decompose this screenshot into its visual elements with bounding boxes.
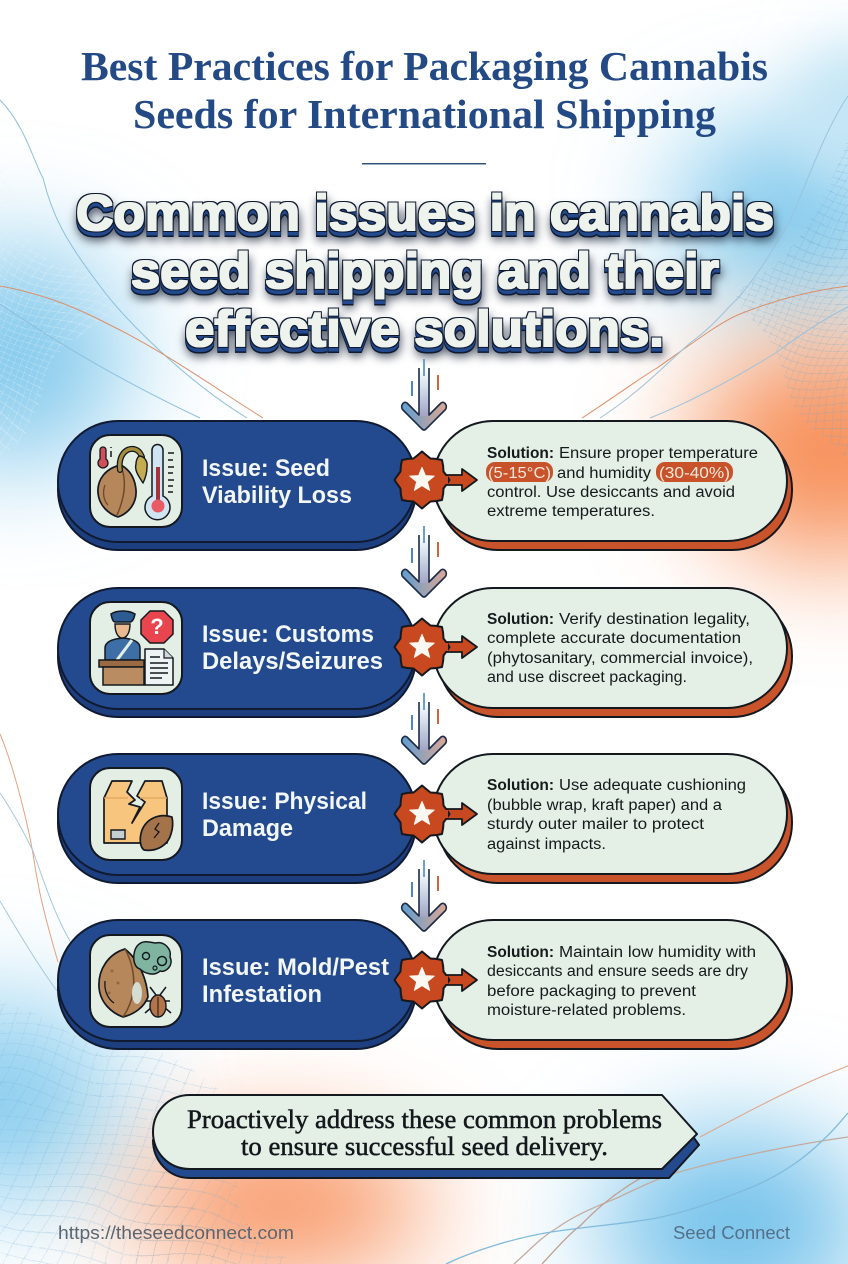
- issue pill: [58, 588, 416, 717]
- title: [81, 43, 768, 137]
- solution text: [487, 777, 746, 853]
- solution pill: [433, 920, 792, 1049]
- solution text: (phytosanitary, commercial invoice),: [487, 650, 753, 667]
- solution text: control. Use desiccants and avoid: [487, 484, 735, 501]
- solution text: before packaging to prevent: [487, 983, 697, 1000]
- panel: customs delays: [58, 588, 792, 717]
- issue pill: [58, 920, 416, 1049]
- solution text: Use adequate cushioning: [559, 777, 746, 794]
- solution text: and use discreet packaging.: [487, 669, 687, 686]
- issue label: Issue: Mold/Pest: [202, 954, 389, 981]
- panel: physical damage: [58, 754, 792, 883]
- headline: Common issues in cannabis: [76, 185, 774, 241]
- icon: cracked box and seed: [90, 768, 182, 860]
- icon: moldy seed and beetle: [90, 935, 182, 1027]
- arrow: into issue 4: [402, 860, 446, 931]
- issue pill: [58, 754, 416, 883]
- solution text: extreme temperatures.: [487, 503, 655, 520]
- issue label: Delays/Seizures: [202, 648, 383, 675]
- issue label: Issue: Customs: [202, 621, 374, 648]
- solution text: desiccants and ensure seeds are dry: [487, 963, 748, 980]
- footer url: https://theseedconnect.com: [58, 1223, 294, 1243]
- solution text: Solution:: [487, 777, 554, 794]
- issue label: [202, 788, 367, 842]
- arrow: into issue 3: [402, 693, 446, 764]
- solution pill: [433, 754, 792, 883]
- solution text: [486, 445, 758, 520]
- title: Best Practices for Packaging Cannabis: [81, 43, 768, 89]
- solution text: (30-40%): [659, 465, 730, 482]
- badge: star connector: [394, 452, 477, 508]
- badge: star connector: [394, 618, 477, 676]
- solution text: [487, 944, 756, 1019]
- solution text: and humidity: [557, 465, 651, 482]
- issue label: [202, 455, 352, 509]
- solution text: (5-15°C): [488, 465, 551, 482]
- callout text: [187, 1105, 662, 1161]
- solution text: Solution:: [487, 944, 554, 961]
- callout text: to ensure successful seed delivery.: [241, 1132, 608, 1161]
- callout text: Proactively address these common problems: [187, 1105, 662, 1134]
- issue label: Damage: [202, 815, 293, 842]
- solution pill: [433, 421, 792, 550]
- headline: effective solutions.: [185, 301, 664, 357]
- headline: [76, 185, 774, 357]
- headline: seed shipping and their: [131, 243, 719, 299]
- issue label: [202, 621, 383, 675]
- solution text: [487, 611, 753, 686]
- issue label: [202, 954, 389, 1008]
- title: Seeds for International Shipping: [133, 91, 716, 137]
- solution text: Maintain low humidity with: [559, 944, 756, 961]
- footer brand: Seed Connect: [673, 1223, 790, 1243]
- panel: mold and pest infestation: [58, 920, 792, 1049]
- issue label: Issue: Physical: [202, 788, 367, 815]
- issue pill: [58, 421, 416, 550]
- solution text: against impacts.: [487, 836, 606, 853]
- panel: seed viability loss: [58, 421, 792, 550]
- icon: sprouting seed and thermometer: [90, 435, 182, 527]
- arrow: into issue 2: [402, 526, 446, 597]
- solution text: Solution:: [487, 445, 554, 462]
- badge: star connector: [394, 786, 477, 842]
- issue label: Issue: Seed: [202, 455, 330, 482]
- solution pill: [433, 588, 792, 717]
- solution text: (bubble wrap, kraft paper) and a: [487, 797, 722, 814]
- callout banner: [153, 1095, 699, 1178]
- solution text: moisture-related problems.: [487, 1002, 686, 1019]
- solution text: complete accurate documentation: [487, 630, 741, 647]
- icon: customs officer, stop sign and document: [90, 602, 182, 694]
- icon: customs officer, stop sign and document: ?: [150, 614, 164, 639]
- solution text: sturdy outer mailer to protect: [487, 816, 705, 833]
- arrow: into issue 1: [402, 359, 446, 430]
- issue label: Viability Loss: [202, 482, 352, 509]
- solution text: Solution:: [487, 611, 554, 628]
- solution text: Verify destination legality,: [559, 611, 750, 628]
- badge: star connector: [394, 952, 477, 1008]
- issue label: Infestation: [202, 981, 322, 1008]
- solution text: Ensure proper temperature: [559, 445, 758, 462]
